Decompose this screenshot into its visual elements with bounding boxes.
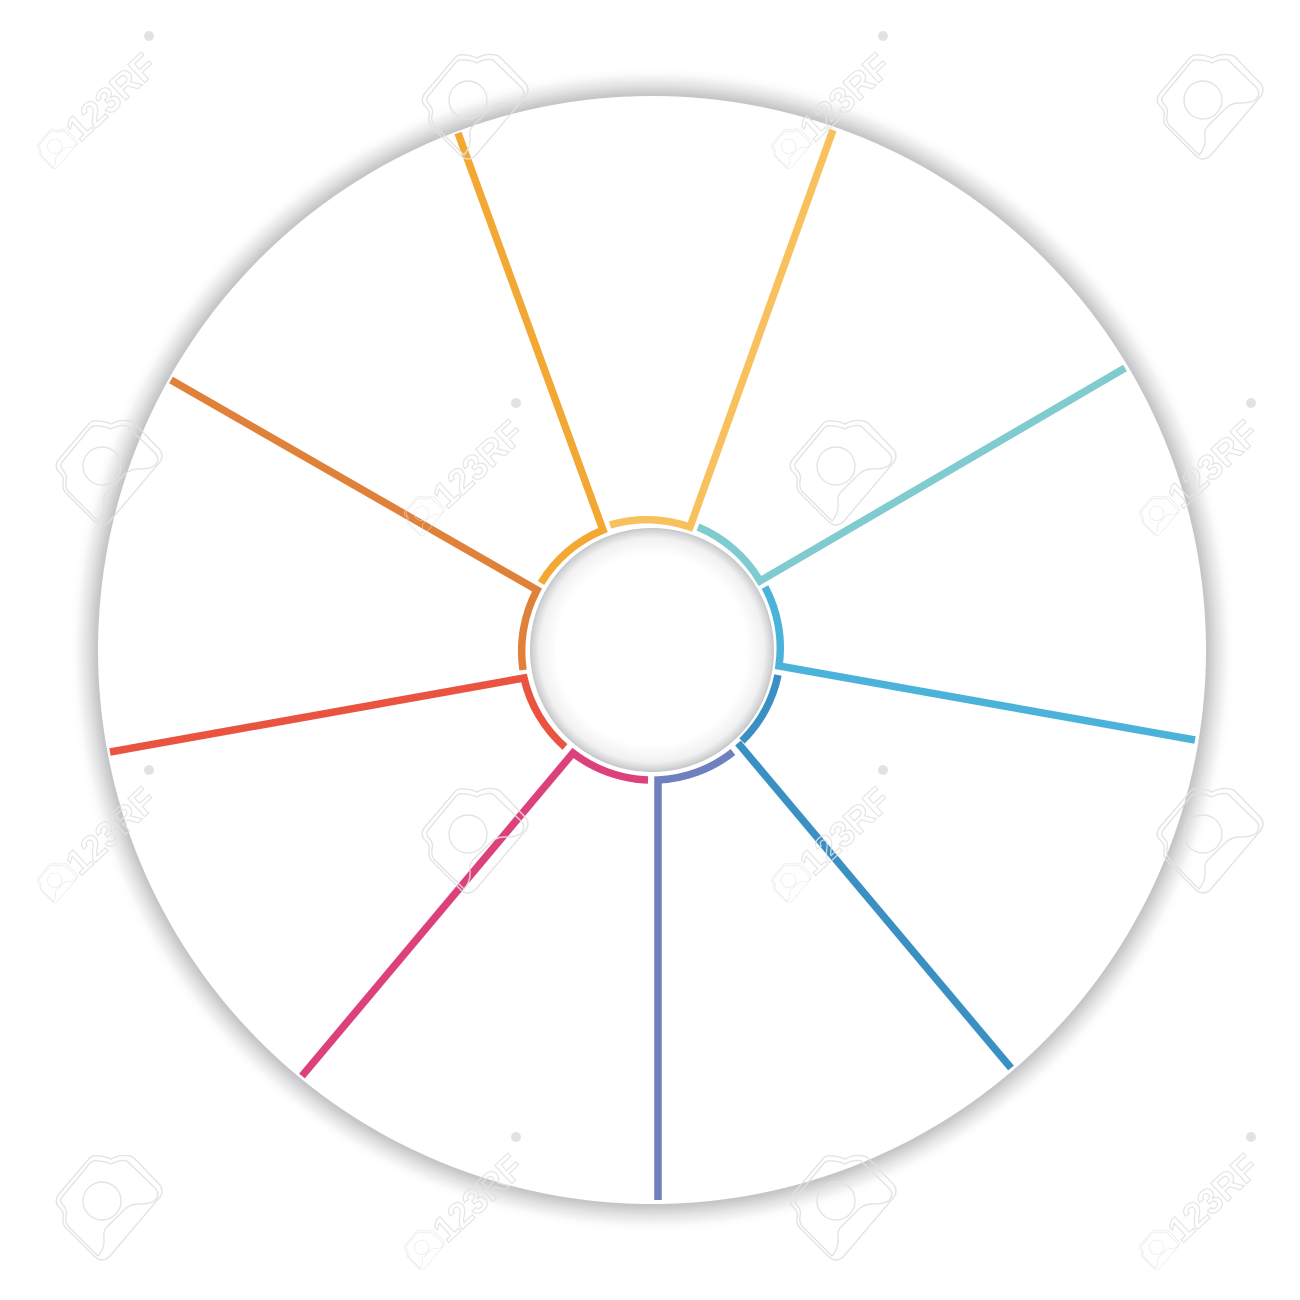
segment: teal spoke and arc	[698, 368, 1125, 581]
watermark: stamp upper left	[56, 420, 162, 525]
watermark: stamp top centre	[422, 54, 528, 159]
watermark: 123RF bottom middle: 123RF	[424, 1146, 531, 1250]
watermark: 123RF top centre: 123RF	[791, 45, 898, 149]
segment: pink spoke and arc	[302, 753, 648, 1076]
segment: dark orange spoke and arc	[171, 380, 537, 670]
panel: main white wheel	[98, 96, 1206, 1204]
watermark: 123RF bottom middle	[404, 1132, 531, 1270]
watermark: 123RF lower centre	[771, 765, 898, 903]
watermark: stamp bottom centre	[790, 1155, 896, 1260]
segment: purple spoke and arc	[658, 752, 733, 1200]
watermark: stamp lower right	[1157, 788, 1263, 893]
watermark: 123RF upper right: 123RF	[1159, 412, 1266, 516]
watermark: 123RF bottom right	[1139, 1132, 1266, 1270]
panel: centre circle	[530, 528, 774, 772]
watermark: stamp lower centre	[422, 788, 528, 893]
segment: red spoke and arc	[110, 678, 565, 752]
watermark: stamp bottom left	[56, 1155, 162, 1260]
watermark: 123RF lower left: 123RF	[57, 779, 164, 883]
watermark: 123RF lower centre: 123RF	[791, 779, 898, 883]
watermark: 123RF upper middle	[404, 398, 531, 536]
watermark: 123RF bottom right: 123RF	[1159, 1146, 1266, 1250]
watermark: 123RF upper right	[1139, 398, 1266, 536]
watermark: stamp top right	[1157, 54, 1263, 159]
segment: orange spoke and arc	[458, 133, 603, 583]
segment: yellow spoke and arc	[610, 130, 833, 527]
segment: blue spoke and arc	[738, 675, 1011, 1068]
watermark: 123RF top left: 123RF	[57, 45, 164, 149]
watermark: 123RF lower left	[37, 765, 164, 903]
watermark: 123RF top centre	[771, 31, 898, 169]
watermark: 123RF top left	[37, 31, 164, 169]
segment: light blue spoke and arc	[765, 587, 1195, 740]
watermark: 123RF upper middle: 123RF	[424, 412, 531, 516]
watermark: stamp upper centre	[790, 420, 896, 525]
